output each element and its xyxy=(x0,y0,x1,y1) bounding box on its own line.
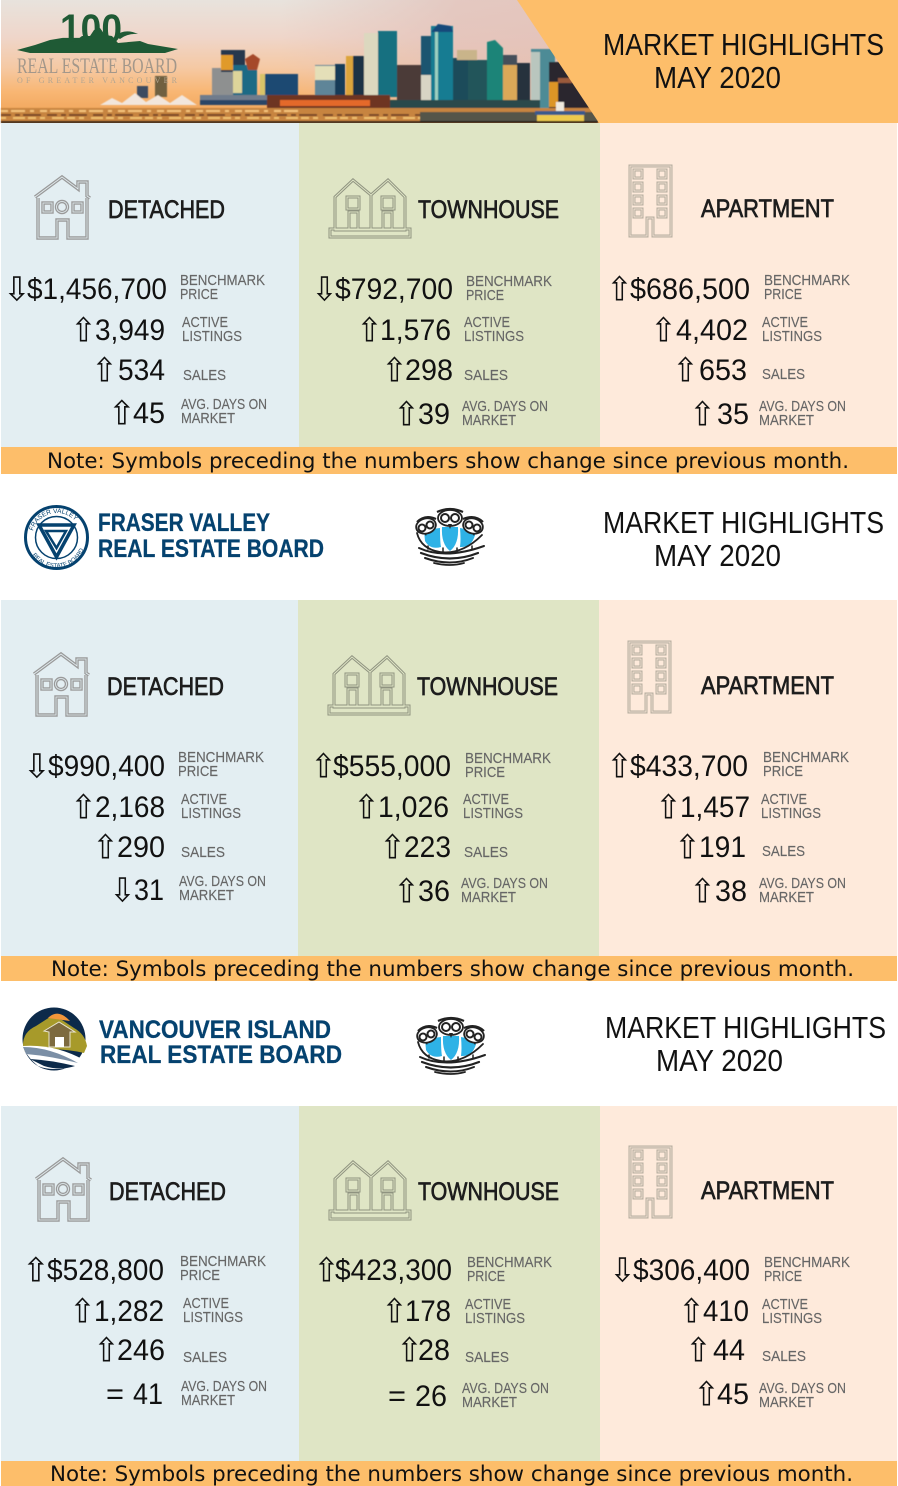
panel: detached: 534 xyxy=(118,354,165,387)
panel: detached: ⇧ xyxy=(70,311,97,350)
panel: townhouse: BENCHMARK xyxy=(467,1254,552,1271)
panel: apartment: APARTMENT xyxy=(701,195,834,223)
panel: apartment: 1,457 xyxy=(680,791,750,824)
title xyxy=(603,505,884,573)
panel: detached: PRICE xyxy=(178,763,218,780)
panel: townhouse: TOWNHOUSE xyxy=(418,1178,559,1206)
section 3: Vancouver Island xyxy=(1,1008,897,1486)
panel: townhouse: TOWNHOUSE xyxy=(417,673,558,701)
panel: detached: DETACHED xyxy=(107,673,224,701)
panel: townhouse: ⇩ xyxy=(311,270,338,309)
panel: detached: BENCHMARK xyxy=(180,272,265,289)
panel: apartment: 44 xyxy=(713,1334,745,1367)
panel: townhouse: PRICE xyxy=(467,1268,505,1285)
panel: apartment: APARTMENT xyxy=(701,1177,834,1205)
panel: townhouse: MARKET xyxy=(461,889,516,906)
panel: apartment: AVG. DAYS ON xyxy=(759,398,846,415)
panel: townhouse: ⇧ xyxy=(381,351,408,390)
panel: detached: $528,800 xyxy=(47,1254,164,1287)
panel: detached: 31 xyxy=(134,874,164,907)
logo: Fraser Valley Real Estate Board: REAL ESTATE BOARD xyxy=(98,535,324,563)
panel: apartment: PRICE xyxy=(764,1268,802,1285)
panel: apartment: ⇧ xyxy=(655,788,682,827)
panel: detached: 2,168 xyxy=(95,791,165,824)
panel: townhouse: 1,576 xyxy=(380,314,451,347)
panel: apartment: SALES xyxy=(762,843,805,860)
panel: townhouse: PRICE xyxy=(466,287,504,304)
panel: townhouse: AVG. DAYS ON xyxy=(461,875,548,892)
note bar: Note: Symbols preceding the numbers show change since previous month. xyxy=(51,957,854,981)
panel: apartment: BENCHMARK xyxy=(764,1254,850,1271)
panel: townhouse: BENCHMARK xyxy=(466,273,552,290)
section 1: Greater Vancouver xyxy=(1,27,897,474)
panel: townhouse: 1,026 xyxy=(378,791,449,824)
panel: townhouse: 178 xyxy=(405,1295,451,1328)
panel: apartment: LISTINGS xyxy=(761,805,821,822)
panel: detached: LISTINGS xyxy=(183,1309,243,1326)
panel: detached: ⇩ xyxy=(23,747,51,786)
panel: detached: LISTINGS xyxy=(182,328,242,345)
panel: apartment: 653 xyxy=(699,354,747,387)
icon: owl family in nest xyxy=(415,1018,486,1074)
panel: apartment: LISTINGS xyxy=(762,328,822,345)
panel: apartment: AVG. DAYS ON xyxy=(759,1380,846,1397)
panel: apartment: $433,700 xyxy=(630,750,748,783)
logo: Real Estate Board of Greater Vancouver: OF GREATER VANCOUVER xyxy=(17,76,178,85)
panel: apartment: ⇧ xyxy=(685,1331,712,1370)
panel: townhouse: $423,300 xyxy=(335,1254,452,1287)
logo: Real Estate Board of Greater Vancouver: 100 xyxy=(60,7,122,51)
panel: detached: LISTINGS xyxy=(181,805,241,822)
panel: apartment: SALES xyxy=(762,1348,806,1365)
panel: townhouse: 223 xyxy=(404,831,451,864)
panel: townhouse: SALES xyxy=(465,1349,509,1366)
panel: townhouse: ⇧ xyxy=(310,747,337,786)
panel: apartment: BENCHMARK xyxy=(764,272,850,289)
panel: townhouse: LISTINGS xyxy=(465,1310,525,1327)
panel: townhouse: ACTIVE xyxy=(465,1296,511,1313)
panel: townhouse: AVG. DAYS ON xyxy=(462,398,548,415)
panel: apartment: MARKET xyxy=(759,412,814,429)
panel: townhouse xyxy=(299,123,600,447)
logo: Fraser Valley Real Estate Board: FRASER VALLEY xyxy=(98,509,270,537)
logo: Fraser Valley Real Estate Board: REAL ESTATE BOARD xyxy=(32,548,83,567)
panel: detached: ⇧ xyxy=(69,1292,96,1331)
panel: apartment: ⇧ xyxy=(650,311,677,350)
panel: detached: MARKET xyxy=(181,410,235,427)
Canada Place sails xyxy=(100,93,197,105)
panel: townhouse: MARKET xyxy=(462,1394,517,1411)
icon: owl family in nest xyxy=(414,509,485,565)
panel: townhouse: 28 xyxy=(418,1334,450,1367)
panel: detached: ACTIVE xyxy=(182,314,228,331)
panel: detached: ⇧ xyxy=(108,394,136,433)
panel: apartment xyxy=(599,600,897,956)
panel: detached: DETACHED xyxy=(108,196,225,224)
panel: detached: 290 xyxy=(117,831,165,864)
panel: townhouse: 39 xyxy=(418,398,450,431)
note bar: Note: Symbols preceding the numbers show change since previous month. xyxy=(50,1462,853,1486)
panel: townhouse: ⇧ xyxy=(353,788,380,827)
panel: detached: PRICE xyxy=(180,286,218,303)
panel: detached xyxy=(1,123,299,447)
panel: townhouse: 298 xyxy=(405,354,453,387)
panel: detached: BENCHMARK xyxy=(180,1253,266,1270)
panel: detached xyxy=(1,600,298,956)
panel: detached: ⇧ xyxy=(93,1331,120,1370)
panel: apartment: ACTIVE xyxy=(761,791,807,808)
panel: detached: DETACHED xyxy=(109,1178,226,1206)
panel: detached: SALES xyxy=(183,367,226,384)
waterfront xyxy=(267,95,390,113)
panel: detached: 246 xyxy=(117,1334,165,1367)
panel: apartment: PRICE xyxy=(763,763,803,780)
panel: townhouse: LISTINGS xyxy=(464,328,524,345)
panel: apartment: 38 xyxy=(715,875,747,908)
panel: detached: ACTIVE xyxy=(181,791,227,808)
panel: apartment: LISTINGS xyxy=(762,1310,822,1327)
panel: detached: ⇧ xyxy=(22,1251,50,1290)
panel: townhouse xyxy=(298,600,599,956)
panel: apartment: MARKET xyxy=(759,889,814,906)
panel: apartment: 35 xyxy=(717,398,749,431)
panel: apartment xyxy=(600,123,897,447)
panel: apartment: ⇩ xyxy=(609,1251,636,1290)
panel: detached: ⇧ xyxy=(91,351,118,390)
panel: detached: ⇧ xyxy=(70,788,97,827)
panel: apartment: PRICE xyxy=(764,286,802,303)
panel: apartment: ACTIVE xyxy=(762,1296,808,1313)
panel: detached: = xyxy=(106,1378,124,1411)
panel: townhouse: ⇧ xyxy=(393,395,420,434)
panel: detached: PRICE xyxy=(180,1267,220,1284)
panel: detached: ACTIVE xyxy=(183,1295,229,1312)
orange title corner xyxy=(517,0,898,123)
panel: townhouse: PRICE xyxy=(465,764,505,781)
panel: townhouse: = xyxy=(388,1380,406,1413)
panel: townhouse: 36 xyxy=(418,875,450,908)
panel: townhouse: ⇧ xyxy=(381,1292,408,1331)
panel: detached: BENCHMARK xyxy=(178,749,264,766)
title: MAY 2020 xyxy=(656,1043,783,1078)
panel: apartment: 410 xyxy=(703,1295,749,1328)
header banner: skyline photograph xyxy=(1,0,601,123)
panel: apartment xyxy=(600,1106,897,1461)
panel: detached xyxy=(1,1106,299,1461)
logo: Real Estate Board of Greater Vancouver: REAL ESTATE BOARD xyxy=(17,53,177,78)
note bar: Note: Symbols preceding the numbers show change since previous month. xyxy=(47,449,849,473)
section 2: Fraser Valley xyxy=(1,505,897,1020)
panel: townhouse: LISTINGS xyxy=(463,805,523,822)
panel: townhouse: SALES xyxy=(464,367,508,384)
panel: apartment: 191 xyxy=(699,831,746,864)
panel: townhouse: $555,000 xyxy=(333,750,451,783)
panel: townhouse: AVG. DAYS ON xyxy=(462,1380,549,1397)
panel: detached: MARKET xyxy=(179,887,234,904)
panel: apartment: ⇧ xyxy=(689,872,716,911)
panel: detached: 41 xyxy=(133,1378,163,1411)
panel: apartment: ACTIVE xyxy=(762,314,808,331)
panel: detached: ⇩ xyxy=(109,871,136,910)
logo: Vancouver Island Real Estate Board xyxy=(22,1008,342,1070)
panel: detached: 3,949 xyxy=(95,314,165,347)
title xyxy=(603,27,884,95)
panel: detached: 1,282 xyxy=(94,1295,164,1328)
panel: apartment: $306,400 xyxy=(633,1254,750,1287)
panel: detached: AVG. DAYS ON xyxy=(181,1378,267,1395)
panel: apartment: ⇧ xyxy=(672,351,699,390)
panel: apartment: ⇧ xyxy=(606,270,633,309)
panel: apartment: BENCHMARK xyxy=(763,749,849,766)
panel: apartment: ⇧ xyxy=(693,1375,720,1414)
panel: townhouse: ACTIVE xyxy=(463,791,509,808)
panel: townhouse: ⇧ xyxy=(356,311,383,350)
panel: townhouse: ACTIVE xyxy=(464,314,510,331)
logo: Real Estate Board of Greater Vancouver xyxy=(17,7,178,85)
panel: detached: ⇧ xyxy=(92,828,119,867)
panel: detached: 45 xyxy=(133,397,165,430)
logo: Vancouver Island Real Estate Board: VANCOUVER ISLAND xyxy=(99,1016,331,1044)
panel: townhouse: $792,700 xyxy=(335,273,453,306)
logo: Fraser Valley Real Estate Board xyxy=(24,505,324,570)
title: MAY 2020 xyxy=(654,538,781,573)
logo: Fraser Valley Real Estate Board: FRASER VALLEY xyxy=(28,508,78,530)
panel: detached: ⇩ xyxy=(3,270,31,309)
panel: apartment: $686,500 xyxy=(630,273,750,306)
title xyxy=(605,1010,886,1078)
logo: Vancouver Island Real Estate Board: REAL ESTATE BOARD xyxy=(100,1041,342,1069)
panel: apartment: AVG. DAYS ON xyxy=(759,875,846,892)
panel: detached: $990,400 xyxy=(48,750,165,783)
panel: townhouse: MARKET xyxy=(462,412,516,429)
panel: townhouse: 26 xyxy=(415,1380,447,1413)
panel: detached: AVG. DAYS ON xyxy=(181,396,267,413)
panel: detached: MARKET xyxy=(181,1392,235,1409)
panel: apartment: 45 xyxy=(717,1378,749,1411)
panel: detached: $1,456,700 xyxy=(27,273,167,306)
panel: apartment: ⇧ xyxy=(689,395,716,434)
panel: apartment: ⇧ xyxy=(674,828,701,867)
panel: townhouse: ⇧ xyxy=(313,1251,340,1290)
panel: apartment: SALES xyxy=(762,366,805,383)
panel: townhouse xyxy=(299,1106,600,1461)
panel: townhouse: ⇧ xyxy=(379,828,406,867)
panel: detached: AVG. DAYS ON xyxy=(179,873,266,890)
panel: townhouse: ⇧ xyxy=(396,1331,423,1370)
panel: apartment: MARKET xyxy=(759,1394,814,1411)
panel: apartment: 4,402 xyxy=(676,314,748,347)
panel: detached: SALES xyxy=(183,1349,227,1366)
panel: detached: SALES xyxy=(181,844,225,861)
title: MAY 2020 xyxy=(654,60,781,95)
panel: apartment: APARTMENT xyxy=(701,672,834,700)
panel: townhouse: TOWNHOUSE xyxy=(418,196,559,224)
skyline buildings xyxy=(1,24,600,123)
panel: apartment: ⇧ xyxy=(678,1292,705,1331)
panel: townhouse: ⇧ xyxy=(393,872,420,911)
panel: apartment: ⇧ xyxy=(606,747,633,786)
panel: townhouse: BENCHMARK xyxy=(465,750,551,767)
panel: townhouse: SALES xyxy=(464,844,508,861)
